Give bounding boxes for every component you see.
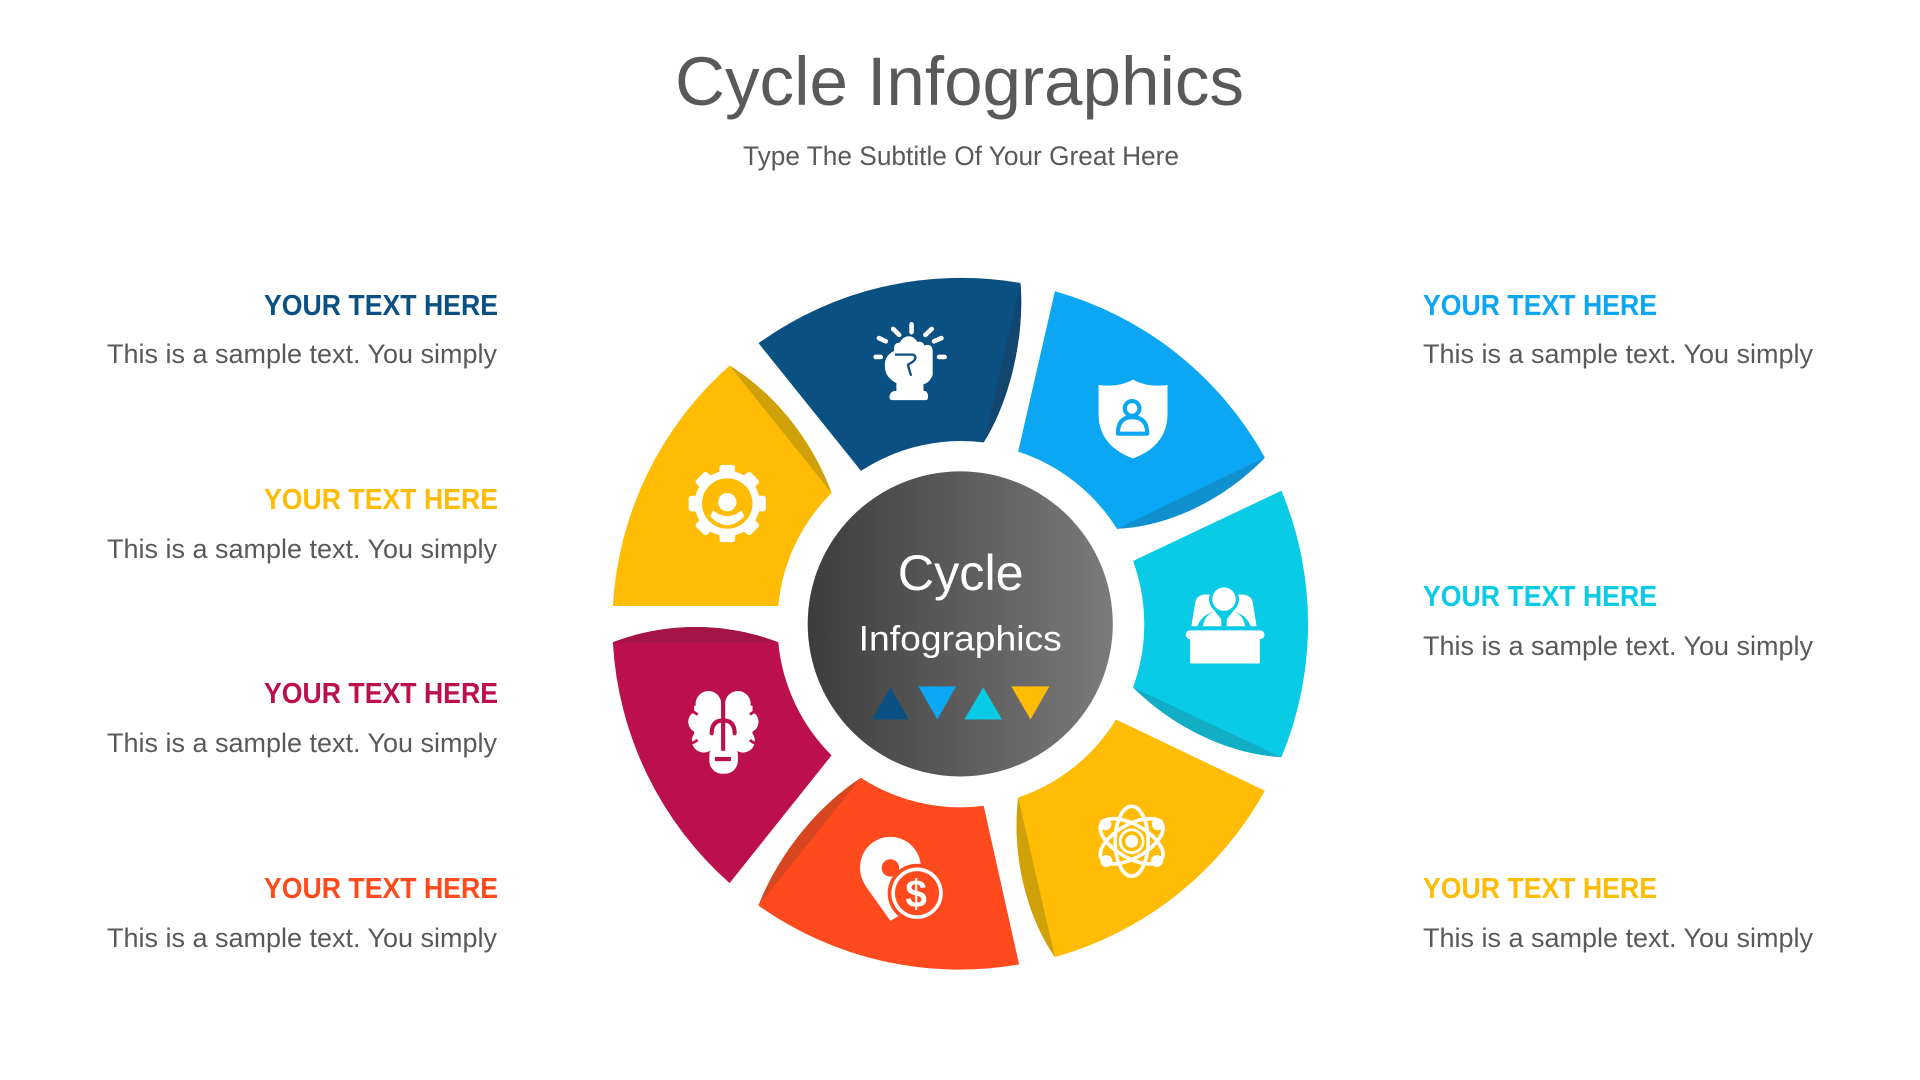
left text block 4	[107, 873, 498, 953]
icon: shield	[1099, 379, 1167, 459]
right text block 2: This is a sample text. You simply	[1423, 631, 1813, 661]
right text block 3	[1423, 873, 1813, 953]
icon: atom	[1093, 806, 1170, 876]
segment: yellow right	[1017, 720, 1265, 957]
center title: Cycle	[898, 545, 1024, 601]
center circle	[808, 471, 1113, 776]
icon: location dollar pin: $	[905, 873, 927, 916]
left text block 3: This is a sample text. You simply	[107, 728, 497, 758]
left text block 1: This is a sample text. You simply	[107, 339, 497, 369]
left text block 3: YOUR TEXT HERE	[264, 678, 498, 710]
left text block 4: YOUR TEXT HERE	[264, 873, 498, 905]
left text block 1	[107, 290, 498, 369]
segment: light blue	[1018, 291, 1265, 529]
segment: dark blue	[759, 278, 1021, 471]
right text block 3: YOUR TEXT HERE	[1423, 873, 1657, 905]
segment: cyan	[1133, 491, 1308, 757]
left text block 2: This is a sample text. You simply	[107, 534, 497, 564]
icon: fist	[876, 324, 945, 400]
segment: yellow left	[613, 366, 832, 606]
right text block 1: YOUR TEXT HERE	[1423, 290, 1657, 322]
left text block 3	[107, 678, 498, 758]
right text block 2	[1423, 581, 1813, 661]
right text block 2: YOUR TEXT HERE	[1423, 581, 1657, 613]
left text block 2	[107, 484, 498, 564]
center triangles	[872, 686, 1049, 720]
segment: orange	[759, 778, 1019, 970]
right text block 3: This is a sample text. You simply	[1423, 923, 1813, 953]
cycle wheel	[613, 278, 1308, 970]
left text block 2: YOUR TEXT HERE	[264, 484, 498, 516]
left text block 1: YOUR TEXT HERE	[264, 290, 498, 322]
title: Cycle Infographics	[675, 43, 1244, 120]
center subtitle: Infographics	[859, 620, 1062, 659]
icon: brain	[688, 691, 759, 774]
icon: podium	[1186, 586, 1264, 663]
icon: location dollar pin	[860, 837, 946, 923]
right text block 1: This is a sample text. You simply	[1423, 339, 1813, 369]
icon: gear with person	[689, 465, 766, 542]
subtitle: Type The Subtitle Of Your Great Here	[743, 141, 1179, 171]
segment: crimson	[613, 627, 832, 883]
left text block 4: This is a sample text. You simply	[107, 923, 497, 953]
right text block 1	[1423, 290, 1813, 369]
